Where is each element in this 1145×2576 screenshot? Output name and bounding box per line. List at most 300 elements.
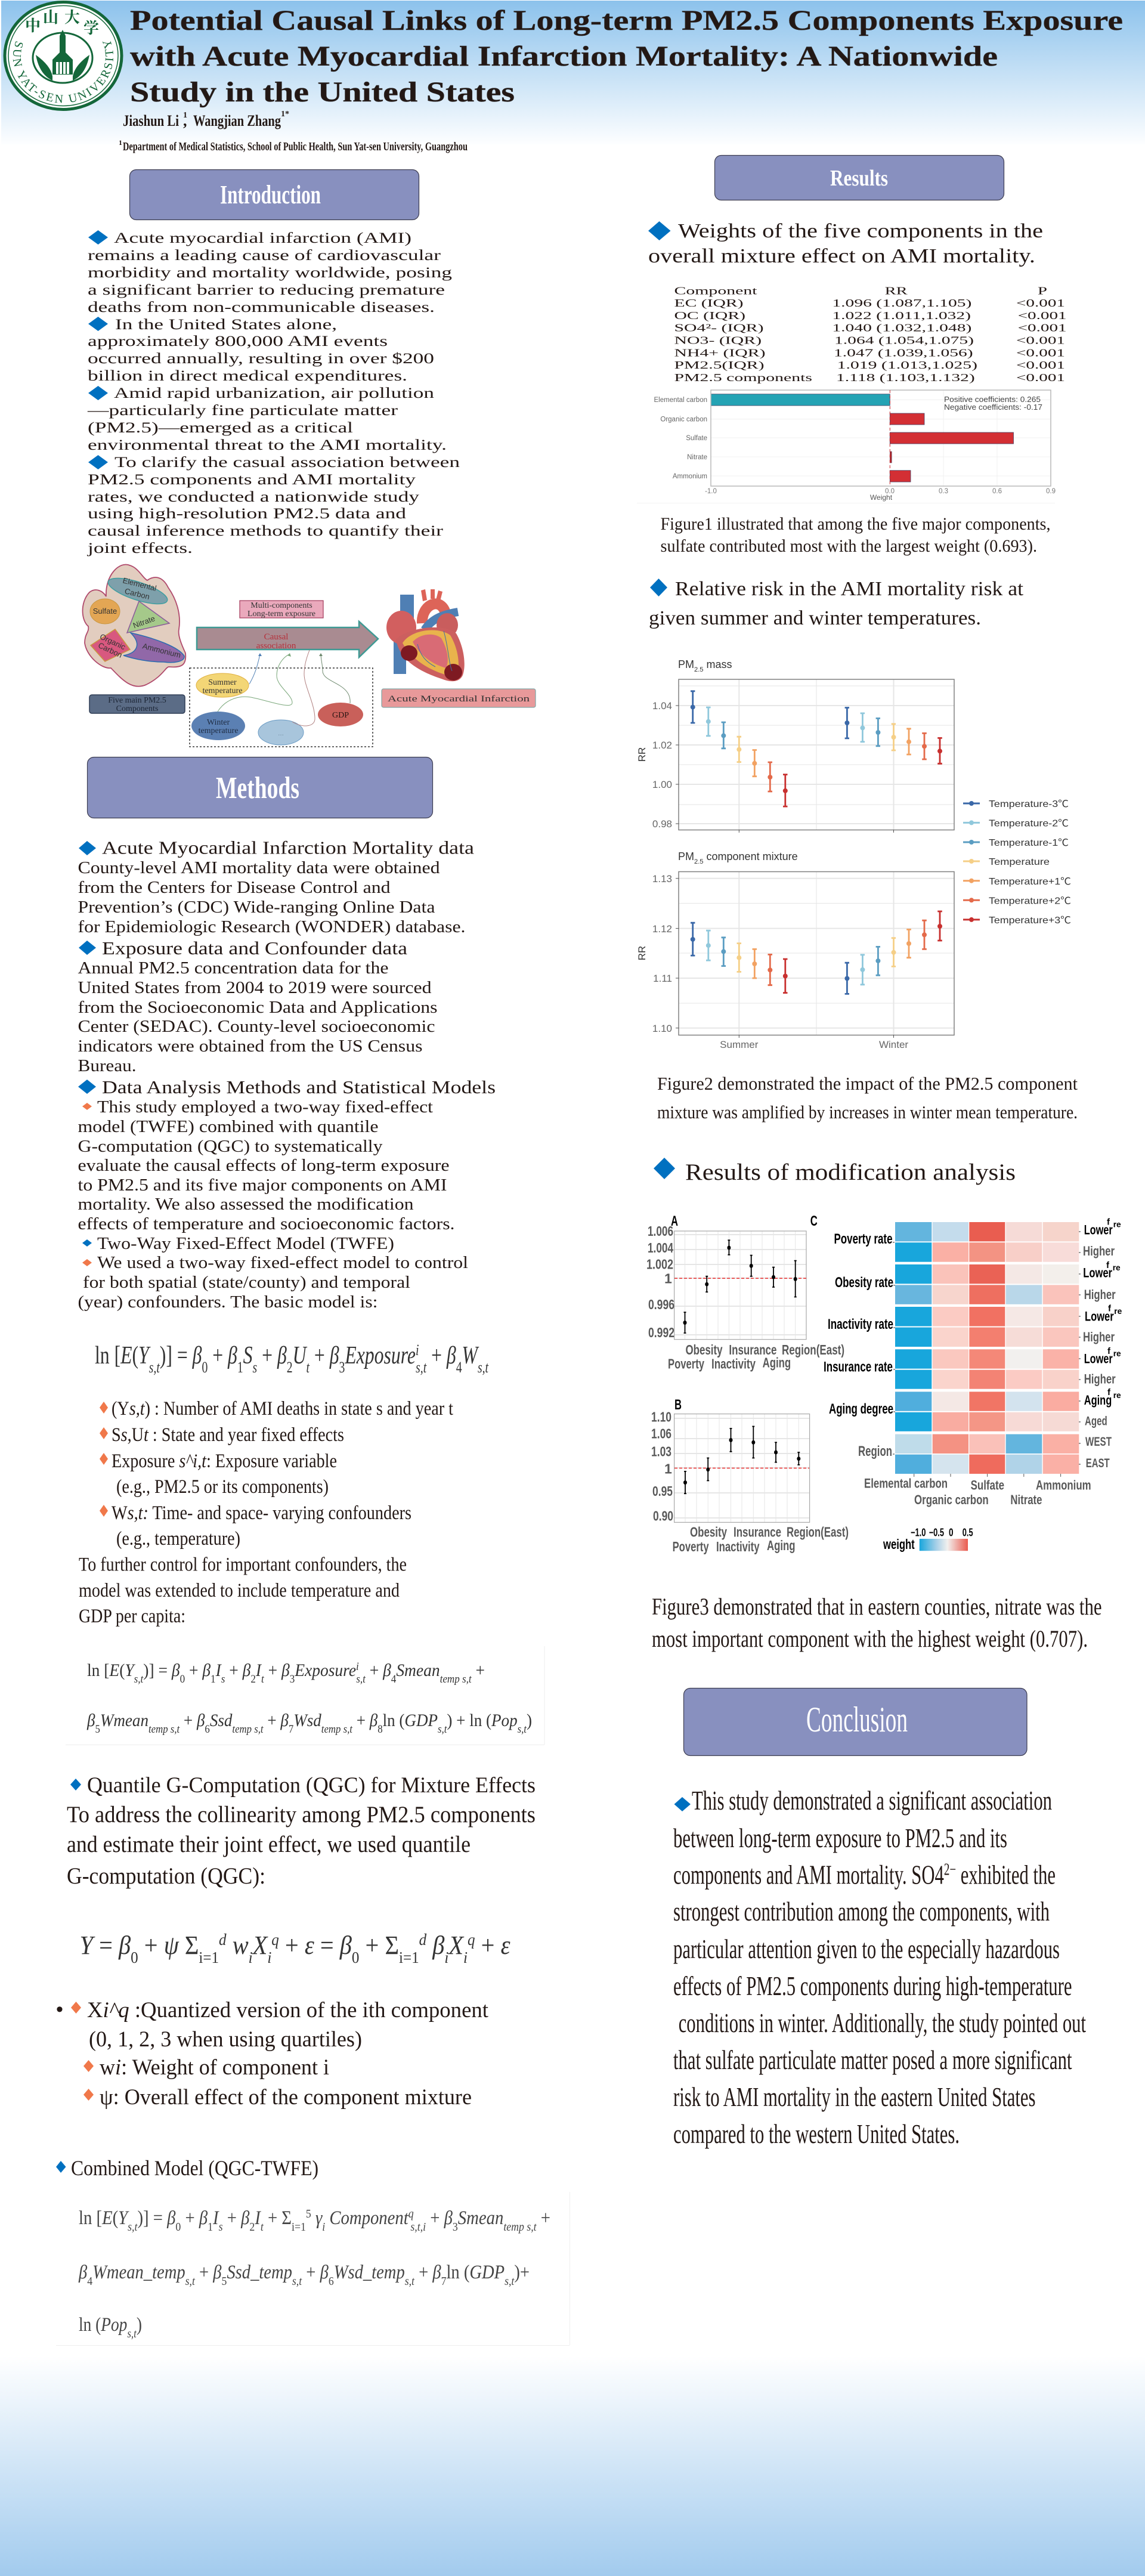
icon: Sun Yat-sen University logo [4, 1, 123, 111]
label: multi-components: Multi-components [250, 601, 312, 610]
caption: figure 1: Figure1 illustrated that among the five major components, [661, 514, 1051, 534]
table: component RR and P values: Component [674, 284, 757, 296]
icon: bullet diamond [654, 1158, 675, 1179]
icon: bullet diamond [648, 221, 670, 240]
panel: PM2.5 component mixture: Summer [720, 1039, 759, 1050]
icon: Sun Yat-sen University logo: 山 [43, 5, 58, 27]
icon: orange diamond [100, 1453, 108, 1465]
chart: component weight bars: Nitrate [687, 454, 707, 461]
panel: PM2.5 component mixture: 1.11 [653, 973, 672, 984]
text block: introduction: PM2.5 components and AMI mortality [88, 472, 416, 488]
text block: data sources: for Epidemiologic Research (WONDER) database. [78, 918, 465, 936]
text block: introduction: rates, we conducted a nationwide study [88, 489, 420, 505]
affiliation: 1 [119, 138, 122, 147]
text block: QGC introduction [67, 1773, 536, 1889]
text block: TWFE model definitions: GDP per capita: [79, 1606, 185, 1627]
text block: data sources: Center (SEDAC). County-level socioeconomic [78, 1018, 435, 1036]
label: five main components [89, 695, 185, 713]
five PM2.5 components cloud: Carbon [97, 641, 123, 660]
text block: combined model heading: Combined Model (QGC-TWFE) [71, 2156, 318, 2180]
heatmap level labels: re [1113, 1263, 1121, 1272]
text block: introduction: using high-resolution PM2.5 data and [88, 506, 407, 522]
icon: orange diamond [83, 2089, 94, 2101]
text block: data sources: Acute Myocardial Infarction Mortality data [102, 837, 474, 858]
heatmap component labels: Sulfate [971, 1478, 1004, 1492]
text block: TWFE model definitions: Ws,t: Time- and space- varying confounders [112, 1502, 411, 1524]
chart: component weight bars: Ammonium [673, 473, 707, 480]
text block: data sources: evaluate the causal effects of long-term exposure [78, 1156, 450, 1175]
legend: temperature scenarios: Temperature+1℃ [989, 877, 1071, 887]
heatmap level labels [1079, 1217, 1122, 1470]
heatmap level labels: Higher [1084, 1287, 1116, 1302]
heading: Introduction: Introduction [220, 180, 321, 209]
text block: introduction: joint effects. [87, 540, 193, 556]
heatmap level labels: WEST [1085, 1435, 1112, 1449]
text block: introduction: billion in direct medical expenditures. [88, 368, 407, 384]
text block: data sources: (year) confounders. The basic model is: [78, 1293, 378, 1312]
text block: data sources: mortality. We also assessed the modification [78, 1195, 414, 1214]
panel: PM2.5 mass [636, 658, 954, 833]
text block: TWFE model definitions: (e.g., temperature) [116, 1528, 240, 1550]
text block: introduction [87, 230, 460, 556]
text block: introduction: Acute myocardial infarction (AMI) [114, 230, 411, 246]
heatmap component labels [864, 1474, 1091, 1507]
text block: data sources: United States from 2004 to 2019 were sourced [78, 979, 432, 997]
bar: ammonium [890, 471, 911, 482]
text block: QGC introduction: To address the collinearity among PM2.5 components [67, 1802, 536, 1827]
icon: orange diamond [100, 1427, 108, 1439]
text block: introduction: (PM2.5)—emerged as a critical [88, 420, 353, 436]
icon: orange diamond [100, 1505, 108, 1517]
equation: QGC: Y = β0 + ψ Σi=1d wiXiq + ε = β0 + Σi=1d βiXiq + ε [80, 1931, 510, 1966]
table: component RR and P values: 1.019 (1.013,1.025) [837, 359, 977, 372]
text block: conclusion [673, 1785, 1086, 2149]
legend: temperature scenarios [963, 799, 1071, 926]
caption: figure 3 [652, 1593, 1102, 1652]
table: component RR and P values: 1.096 (1.087,1.105) [832, 297, 971, 310]
heading: Results [714, 155, 1004, 200]
chart A: modification effect: Inactivity [711, 1356, 756, 1372]
panel: PM2.5 component mixture: 1.12 [652, 923, 672, 935]
heading: Introduction [130, 169, 419, 219]
panel: PM2.5 component mixture: 1.13 [652, 873, 672, 885]
panel: PM2.5 component mixture: Winter [879, 1039, 908, 1050]
arrow: causal association: association [256, 641, 296, 651]
text block: conclusion: compared to the western United States. [673, 2119, 960, 2149]
caption: figure 2: Figure2 demonstrated the impact of the PM2.5 component [657, 1073, 1078, 1094]
text block: TWFE model definitions: (e.g., PM2.5 or its components) [116, 1476, 329, 1498]
panel: PM2.5 component mixture [636, 851, 954, 1050]
arrow: causal association: Causal [264, 632, 288, 642]
five PM2.5 components cloud: Ammonium [141, 641, 182, 660]
chart A: modification effect: 0.996 [648, 1297, 674, 1312]
text block: introduction: deaths from non-communicable diseases. [88, 299, 435, 316]
chart: component weight bars: 0.0 [885, 488, 895, 495]
text block: data sources: Annual PM2.5 concentration data for the [78, 959, 389, 978]
text block: data sources: effects of temperature and socioeconomic factors. [78, 1215, 454, 1233]
icon: bullet diamond [650, 579, 667, 596]
icon: bullet diamond [88, 230, 108, 245]
legend: temperature scenarios: Temperature [989, 857, 1050, 867]
text block: data sources: for both spatial (state/county) and temporal [83, 1273, 410, 1292]
text block: conclusion: components and AMI mortality. SO42− exhibited the [673, 1860, 1056, 1890]
heatmap row groups: Obesity rate [835, 1275, 893, 1291]
heatmap level labels: f [1107, 1387, 1111, 1397]
panel: PM2.5 mass: RR [636, 747, 648, 762]
text block: weights heading [648, 220, 1043, 267]
text block: introduction: To clarify the casual association between [114, 454, 460, 471]
text block: QGC definitions: wi: Weight of component i [100, 2055, 329, 2080]
heading: Conclusion: Conclusion [806, 1700, 908, 1739]
chart B: modification effect: 1.06 [651, 1425, 671, 1441]
chart A: modification effect: Insurance [729, 1342, 776, 1357]
table: component RR and P values: OC (IQR) [674, 310, 745, 322]
label: five main components: Five main PM2.5 [108, 696, 166, 705]
chart B: modification effect: 1 [664, 1461, 672, 1477]
text block: QGC introduction: Quantile G-Computation (QGC) for Mixture Effects [87, 1773, 536, 1798]
heatmap level labels: f [1107, 1217, 1110, 1227]
table: component RR and P values: <0.001 [1016, 372, 1065, 384]
authors: , [183, 112, 187, 129]
header gradient background [1, 1, 1145, 144]
text block: introduction: causal inference methods to quantify their [88, 523, 444, 539]
equation: combined QGC-TWFE model [56, 2192, 570, 2345]
five PM2.5 components cloud: Elemental [122, 576, 157, 593]
equation: combined QGC-TWFE model: ln [E(Ys,t)] = β0 + β1Is + β2It + Σi=15 γi Componentq s,t,i + β3Smeantemp s,t + [79, 2207, 550, 2234]
title: Study in the United States [130, 76, 515, 108]
text block: introduction: In the United States alone, [115, 317, 337, 333]
heatmap row groups [824, 1231, 895, 1459]
table: component RR and P values: <0.001 [1016, 335, 1065, 347]
icon: Sun Yat-sen University logo: 大 [64, 5, 80, 27]
dashed modifier box [190, 668, 373, 747]
label: five main components: Components [116, 704, 158, 713]
legend: temperature scenarios: Temperature-1℃ [989, 838, 1069, 848]
chart B: modification effect: Obesity [690, 1524, 727, 1540]
equation: combined QGC-TWFE model: ln (Pops,t) [79, 2314, 142, 2340]
authors: Jiashun Li [123, 112, 179, 129]
heading: Methods [87, 757, 433, 818]
affiliation: Department of Medical Statistics, School of Public Health, Sun Yat-sen University, Guangzhou [123, 140, 468, 153]
chart: component weight bars: Positive coefficients: 0.265 [944, 395, 1041, 404]
text block: TWFE model definitions [79, 1398, 453, 1627]
heading: Conclusion [683, 1688, 1027, 1756]
chart B: modification effect [651, 1397, 849, 1554]
text block: data sources: G-computation (QGC) to systematically [78, 1137, 383, 1156]
text block: data sources: model (TWFE) combined with quantile [78, 1118, 378, 1136]
equation: extended TWFE model: ln [E(Ys,t)] = β0 + β1Is + β2It + β3Exposurei s,t + β4Smeantemp s,t + [87, 1660, 485, 1686]
footer gradient background [0, 2356, 1145, 2576]
chart: component weight bars: Weight [870, 493, 893, 502]
chart B: modification effect: Region(East) [787, 1524, 849, 1540]
chart B: modification effect: B [674, 1397, 682, 1413]
table: component RR and P values: <0.001 [1016, 297, 1065, 309]
heatmap level labels: Lower [1084, 1352, 1113, 1366]
diagram: causal framework [82, 565, 536, 747]
heatmap component labels: Nitrate [1010, 1492, 1042, 1507]
icon: orange diamond [82, 1259, 92, 1266]
modifier: summer temperature: temperature [203, 686, 242, 695]
heatmap row groups: Poverty rate [834, 1231, 892, 1247]
text block: data sources: Two-Way Fixed-Effect Model (TWFE) [97, 1235, 394, 1253]
chart B: modification effect: Inactivity [716, 1539, 760, 1554]
heatmap level labels: Higher [1084, 1372, 1116, 1387]
text block: introduction: environmental threat to the AMI mortality. [88, 437, 447, 453]
heatmap component labels: Elemental carbon [864, 1476, 948, 1490]
text block: data sources: from the Centers for Disease Control and [78, 879, 390, 897]
chart B: modification effect: Aging [767, 1538, 796, 1553]
five PM2.5 components cloud: Organic [98, 632, 127, 652]
heatmap row groups: Region [858, 1443, 892, 1459]
arrows: modifier effects [218, 650, 350, 726]
table: component RR and P values: 1.040 (1.032,1.048) [832, 322, 971, 335]
chart B: modification effect: 1.03 [651, 1444, 671, 1459]
chart: component weight bars: Organic carbon [660, 416, 707, 423]
text block: data sources: from the Socioeconomic Data and Applications [78, 998, 438, 1017]
title: Potential Causal Links of Long-term PM2.5 Components Exposure [130, 5, 1123, 36]
chart A: modification effect: 1 [664, 1271, 672, 1287]
heatmap level labels: Aging [1084, 1393, 1112, 1408]
label: acute myocardial infarction [382, 689, 536, 707]
text block: introduction: —particularly fine particulate matter [87, 403, 398, 419]
table: component RR and P values: 1.047 (1.039,1.056) [834, 347, 973, 359]
text block: QGC definitions: Xi^q :Quantized version of the ith component [87, 1998, 489, 2023]
text block: data sources: indicators were obtained from the US Census [78, 1037, 422, 1056]
text block: data sources: This study employed a two-way fixed-effect [97, 1098, 433, 1117]
table: component RR and P values: EC (IQR) [674, 297, 743, 310]
chart A: modification effect: 0.992 [648, 1325, 674, 1340]
legend: temperature scenarios: Temperature+2℃ [989, 896, 1071, 907]
equation: extended TWFE model: β5Wmeantemp s,t + β6Ssdtemp s,t + β7Wsdtemp s,t + β8ln (GDPs,t) + ln (Pops,t) [86, 1711, 532, 1736]
legend: temperature scenarios: Temperature-2℃ [989, 818, 1069, 829]
heatmap component labels: Ammonium [1036, 1478, 1091, 1492]
modifier: other: ... [278, 728, 284, 737]
title: with Acute Myocardial Infarction Mortality: A Nationwide [130, 41, 998, 72]
chart B: modification effect: 0.95 [652, 1483, 673, 1499]
text block: data sources [78, 837, 496, 1312]
text block: QGC introduction: G-computation (QGC): [67, 1863, 265, 1889]
five PM2.5 components cloud: Sulfate [93, 607, 117, 616]
table: component RR and P values: P [1038, 284, 1047, 296]
label: multi-components: Long-term exposure [247, 610, 315, 619]
table: component RR and P values [674, 284, 1067, 384]
legend: temperature scenarios: Temperature+3℃ [989, 916, 1071, 926]
heading: Results: Results [830, 166, 888, 191]
legend: temperature scenarios: Temperature-3℃ [989, 799, 1069, 809]
title [130, 5, 1123, 108]
heatmap component labels: Organic carbon [914, 1492, 989, 1507]
heatmap level labels: EAST [1086, 1456, 1110, 1470]
table: component RR and P values: NH4+ (IQR) [674, 347, 766, 359]
caption: figure 1 [661, 514, 1051, 556]
text block: relative risk heading: Relative risk in the AMI mortality risk at [675, 578, 1024, 600]
chart A: modification effect: Aging [763, 1355, 791, 1371]
icon: Sun Yat-sen University logo: 学 [83, 16, 99, 38]
table: component RR and P values: NO3- (IQR) [674, 335, 762, 347]
icon: bullet diamond [88, 386, 108, 400]
five PM2.5 components cloud: Carbon [124, 586, 151, 601]
icon: bullet diamond [88, 317, 108, 331]
bar: organic carbon [890, 413, 924, 425]
heatmap row groups: Inactivity rate [828, 1316, 893, 1332]
modifier: GDP: GDP [332, 711, 349, 720]
icon: orange diamond [71, 2002, 81, 2014]
text block: relative risk heading [649, 578, 1024, 629]
icon: Sun Yat-sen University logo: SUN YAT-SEN UNIVERSITY [13, 41, 113, 103]
heading: Methods: Methods [216, 771, 299, 805]
authors: 1* [281, 110, 289, 119]
caption: figure 2 [657, 1073, 1078, 1122]
text block: data sources: Exposure data and Confounder data [102, 938, 407, 958]
table: component RR and P values: <0.001 [1016, 347, 1065, 358]
chart A: modification effect: 1.004 [648, 1240, 673, 1255]
heatmap level labels: Higher [1083, 1329, 1115, 1344]
heatmap level labels: re [1113, 1349, 1121, 1358]
table: component RR and P values: SO4²- (IQR) [674, 322, 764, 335]
arrow: causal association [197, 621, 378, 657]
panel: PM2.5 mass: 1.02 [652, 740, 672, 751]
panel: PM2.5 component mixture: RR [636, 946, 648, 960]
equation: combined QGC-TWFE model: β4Wmean_temps,t + β5Ssd_temps,t + β6Wsd_temps,t + β7ln (GDPs,t)+ [78, 2262, 530, 2288]
table: component RR and P values: <0.001 [1018, 310, 1067, 321]
table: component RR and P values: <0.001 [1016, 359, 1065, 371]
table: component RR and P values: 1.022 (1.011,1.032) [832, 310, 971, 322]
modifier: winter temperature: Winter [207, 718, 230, 727]
heatmap row groups: Insurance rate [824, 1359, 893, 1375]
text block: QGC definitions: (0, 1, 2, 3 when using quartiles) [89, 2027, 362, 2052]
text block: introduction: morbidity and mortality worldwide, posing [88, 265, 453, 281]
modifier: summer temperature: Summer [208, 678, 237, 687]
icon: small blue diamond [82, 1239, 92, 1247]
heatmap level labels: re [1114, 1306, 1122, 1316]
heatmap level labels: Lower [1084, 1222, 1113, 1237]
icon: orange diamond [82, 1103, 92, 1110]
icon: bullet diamond [674, 1797, 691, 1811]
five PM2.5 components cloud [82, 565, 185, 686]
legend: weight colour bar: weight [883, 1536, 915, 1552]
chart A: modification effect: 1.002 [646, 1256, 673, 1272]
text block: QGC definitions: ψ: Overall effect of the component mixture [100, 2085, 472, 2110]
chart C: component weight heatmap: C [810, 1213, 818, 1229]
legend: weight colour bar: 0.5 [963, 1526, 973, 1538]
chart C: component weight heatmap [810, 1213, 1122, 1552]
chart: component weight bars: 0.9 [1046, 488, 1056, 495]
icon: bullet diamond [78, 1080, 96, 1094]
text block: data sources: Prevention’s (CDC) Wide-ranging Online Data [78, 898, 435, 917]
chart: component weight bars [637, 390, 1056, 503]
chart A: modification effect: Poverty [668, 1356, 704, 1372]
icon: orange diamond [83, 2060, 94, 2072]
panel: PM2.5 component mixture: PM2.5 component mixture [678, 851, 798, 865]
text block: TWFE model definitions: (Ys,t) : Number of AMI deaths in state s and year t [112, 1398, 453, 1420]
chart A: modification effect: Region(East) [782, 1342, 844, 1357]
chart B: modification effect: Insurance [734, 1524, 781, 1540]
table: component RR and P values: 1.064 (1.054,1.075) [834, 335, 974, 347]
heatmap level labels: Higher [1083, 1244, 1115, 1258]
text block: weights heading: overall mixture effect on AMI mortality. [648, 245, 1035, 267]
heatmap level labels: f [1106, 1260, 1110, 1270]
text block: TWFE model definitions: Exposure s^i,t: Exposure variable [112, 1451, 337, 1472]
text block: QGC definitions: • [56, 1998, 63, 2021]
table: component RR and P values: PM2.5 components [674, 372, 812, 384]
bar: nitrate [890, 452, 892, 463]
chart: component weight bars: 0.3 [939, 488, 948, 495]
text block: weights heading: Weights of the five components in the [678, 220, 1043, 242]
chart: component weight bars: 0.6 [992, 488, 1002, 495]
text block: relative risk heading: given summer and winter temperatures. [649, 607, 981, 629]
icon: bullet diamond [70, 1779, 81, 1790]
icon: bullet diamond [88, 455, 108, 469]
chart: component weight bars: Negative coefficients: -0.17 [944, 403, 1042, 412]
icon: orange diamond [100, 1402, 108, 1414]
legend: weight colour bar: −1.0 [911, 1526, 926, 1538]
chart: component weight bars: Sulfate [686, 435, 707, 442]
authors: 1 [183, 111, 187, 120]
affiliation [119, 138, 468, 153]
text block: introduction: Amid rapid urbanization, air pollution [114, 385, 435, 401]
chart: component weight bars: -1.0 [705, 488, 717, 495]
table: component RR and P values: 1.118 (1.103,1.132) [836, 372, 975, 384]
chart A: modification effect: 1.006 [648, 1223, 673, 1239]
text block: data sources: We used a two-way fixed-effect model to control [97, 1254, 468, 1272]
heatmap level labels: re [1113, 1390, 1121, 1400]
caption: figure 2: mixture was amplified by increases in winter mean temperature. [657, 1102, 1078, 1122]
icon: heart [386, 589, 465, 681]
text block: modification analysis heading: Results of modification analysis [685, 1159, 1016, 1185]
text block: introduction: approximately 800,000 AMI events [88, 333, 388, 350]
modifier: winter temperature [191, 712, 245, 740]
modifier: summer temperature [196, 673, 249, 697]
panel: PM2.5 mass: 1.00 [652, 779, 672, 790]
table: component RR and P values: <0.001 [1018, 322, 1067, 334]
chart B: modification effect: 1.10 [651, 1409, 671, 1425]
modifier: other [258, 720, 304, 745]
modifier: winter temperature: temperature [199, 726, 238, 735]
legend: weight colour bar: −0.5 [929, 1526, 944, 1538]
text block: TWFE model definitions: To further control for important confounders, the [79, 1554, 407, 1576]
heatmap level labels: f [1107, 1346, 1111, 1356]
chart A: modification effect [646, 1213, 844, 1372]
heatmap level labels: Lower [1085, 1309, 1114, 1324]
heatmap level labels: f [1108, 1304, 1112, 1314]
table: component RR and P values: RR [885, 284, 908, 296]
bar: elemental carbon [711, 394, 890, 406]
heatmap cells [895, 1222, 1079, 1474]
icon: Sun Yat-sen University logo: 中 [25, 14, 41, 36]
text block: data sources: Bureau. [78, 1057, 136, 1075]
heatmap level labels: Lower [1083, 1266, 1112, 1281]
text block: introduction: remains a leading cause of cardiovascular [88, 248, 441, 264]
chart A: modification effect: A [671, 1213, 678, 1229]
chart: temperature modification RR [636, 658, 1071, 1050]
panel: PM2.5 component mixture: 1.10 [652, 1023, 672, 1034]
legend: weight colour bar: 0 [949, 1526, 953, 1538]
text block: data sources: to PM2.5 and its five major components on AMI [78, 1176, 447, 1195]
chart: component weight bars: Elemental carbon [654, 397, 707, 404]
caption: figure 1: sulfate contributed most with the largest weight (0.693). [661, 536, 1037, 556]
text block: data sources: Data Analysis Methods and Statistical Models [102, 1077, 496, 1097]
label: multi-components [240, 601, 323, 619]
panel: PM2.5 mass: 1.04 [652, 700, 672, 712]
bar: sulfate [890, 432, 1014, 444]
chart B: modification effect: Poverty [673, 1539, 709, 1554]
legend: weight colour bar [883, 1526, 973, 1552]
equation: extended TWFE model [66, 1646, 544, 1745]
text block: data sources: County-level AMI mortality data were obtained [78, 859, 440, 877]
text block: TWFE model definitions: model was extended to include temperature and [79, 1580, 400, 1601]
authors: Wangjian Zhang [193, 112, 281, 129]
five PM2.5 components cloud: Nitrate [132, 614, 156, 630]
